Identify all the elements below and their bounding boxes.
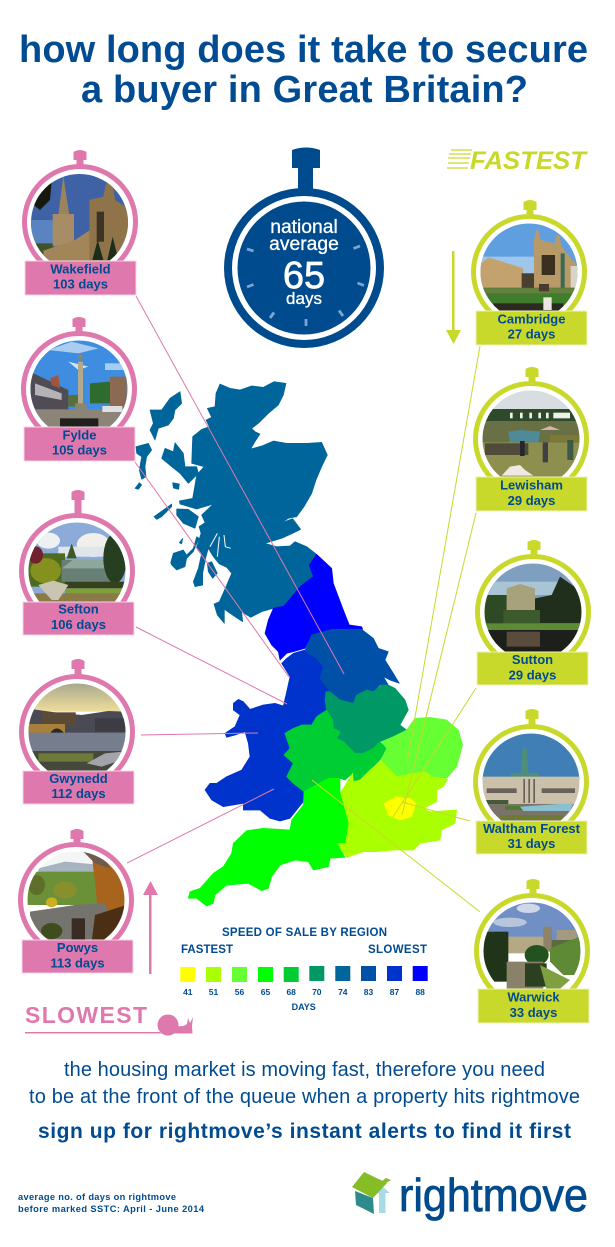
closing message: to be at the front of the queue when a property hits rightmove xyxy=(29,1086,580,1108)
closing message xyxy=(29,1059,580,1143)
region: East of England xyxy=(381,717,463,778)
photo: Powys autumn valley village xyxy=(27,852,128,942)
footnote xyxy=(18,1192,205,1214)
label: Sutton: 29 days xyxy=(509,668,556,682)
photo: Wakefield cathedral xyxy=(31,174,128,260)
legend: speed of sale by region: FASTEST xyxy=(181,944,233,956)
legend: speed of sale by region: 68 xyxy=(286,987,296,997)
arrow: fastest down xyxy=(446,251,461,344)
label: Sefton: Sefton xyxy=(58,602,99,616)
label: Warwick xyxy=(478,989,589,1023)
legend: speed of sale by region: 74 xyxy=(338,987,348,997)
label: Cambridge xyxy=(476,311,587,345)
stopwatch: Gwynedd xyxy=(22,659,134,804)
label: Gwynedd: 112 days xyxy=(51,786,106,801)
region: North West and Wales xyxy=(205,650,330,821)
icon: snail xyxy=(154,1014,193,1036)
region: West Midlands xyxy=(284,710,387,792)
slowest heading with snail xyxy=(25,1002,193,1036)
legend: speed of sale by region: 56 xyxy=(235,987,244,997)
icon: house with arrow xyxy=(352,1172,391,1214)
photo: Cambridge King's College xyxy=(478,222,580,312)
label: Sefton xyxy=(23,602,134,635)
legend: speed of sale by region xyxy=(180,927,428,1012)
label: Gwynedd xyxy=(23,771,134,804)
national average stopwatch: 65 xyxy=(283,255,325,297)
stopwatch: Waltham Forest xyxy=(476,709,587,854)
label: Cambridge: Cambridge xyxy=(498,312,565,326)
photo: Lewisham festival crowd xyxy=(482,390,580,476)
legend: speed of sale by region: 87 xyxy=(390,987,399,997)
label: Waltham Forest: 31 days xyxy=(508,836,555,851)
stopwatch: Powys xyxy=(20,829,133,973)
label: Wakefield xyxy=(25,261,136,295)
title xyxy=(19,29,588,111)
stopwatch: Sutton xyxy=(477,540,588,685)
connector lines from towns to map xyxy=(127,296,480,912)
photo: Waltham Forest town hall xyxy=(480,730,582,821)
legend: speed of sale by region: 41 xyxy=(183,987,193,997)
label: Waltham Forest xyxy=(476,821,587,854)
arrow: slowest up xyxy=(143,881,158,974)
label: Fylde xyxy=(24,427,135,461)
fastest heading: FASTEST xyxy=(470,147,589,175)
label: Warwick: 33 days xyxy=(510,1005,557,1020)
legend: speed of sale by region: DAYS xyxy=(292,1002,316,1012)
regions: England and Wales xyxy=(188,554,463,906)
photo: Warwick castle and river xyxy=(484,902,580,988)
stopwatch: Sefton xyxy=(22,490,134,635)
label: Fylde: Fylde xyxy=(63,428,96,442)
label: Powys: 113 days xyxy=(50,956,105,970)
legend: speed of sale by region: 65 xyxy=(261,987,270,997)
label: Waltham Forest: Waltham Forest xyxy=(483,821,581,836)
legend: speed of sale by region: 51 xyxy=(209,987,218,997)
region: Yorkshire xyxy=(305,629,399,703)
label: Sutton: Sutton xyxy=(512,652,553,667)
footnote: average no. of days on rightmove xyxy=(18,1192,176,1202)
label: Fylde: 105 days xyxy=(52,443,107,458)
legend: speed of sale by region: 83 xyxy=(364,987,373,997)
stopwatch: Cambridge xyxy=(474,200,587,345)
region: Scotland xyxy=(135,382,327,623)
stopwatch: Warwick xyxy=(476,879,589,1023)
label: Sutton xyxy=(477,652,588,685)
label: Powys xyxy=(22,940,133,973)
slowest heading with snail: SLOWEST xyxy=(25,1002,147,1028)
photo: Sefton park glasshouse xyxy=(28,522,126,602)
closing message: the housing market is moving fast, therefore you need xyxy=(64,1059,545,1081)
region: South East xyxy=(337,761,457,857)
label: Cambridge: 27 days xyxy=(508,326,555,342)
label: Gwynedd: Gwynedd xyxy=(49,771,108,786)
legend: speed of sale by region: SLOWEST xyxy=(368,944,427,956)
photo: Sutton country house and lake xyxy=(482,562,583,652)
national average stopwatch: national xyxy=(270,217,338,238)
title: how long does it take to secure xyxy=(19,29,588,71)
footnote: before marked SSTC: April - June 2014 xyxy=(18,1204,205,1214)
map of Great Britain by region xyxy=(135,382,463,906)
label: Wakefield: Wakefield xyxy=(50,262,111,276)
legend: speed of sale by region: SPEED OF SALE BY REGION xyxy=(222,927,387,939)
region: South West xyxy=(188,778,348,906)
national average stopwatch: average xyxy=(269,234,339,255)
label: Powys: Powys xyxy=(57,940,98,955)
label: Warwick: Warwick xyxy=(507,990,560,1004)
region: London xyxy=(384,797,416,820)
label: Lewisham: Lewisham xyxy=(500,478,563,492)
region: East Midlands xyxy=(325,685,408,753)
stopwatch: Fylde xyxy=(24,317,135,461)
region: North East and Cumbria xyxy=(265,554,363,660)
stopwatch: Wakefield xyxy=(24,150,136,295)
label: Lewisham: 29 days xyxy=(508,493,555,508)
title: a buyer in Great Britain? xyxy=(81,69,528,111)
closing message: sign up for rightmove’s instant alerts to find it first xyxy=(38,1120,571,1143)
stopwatch: Lewisham xyxy=(476,367,587,511)
national average stopwatch: days xyxy=(286,289,322,308)
label: Wakefield: 103 days xyxy=(53,277,108,292)
legend: speed of sale by region: 70 xyxy=(312,987,322,997)
label: Sefton: 106 days xyxy=(51,617,106,632)
national average stopwatch xyxy=(224,148,384,348)
rightmove logo: rightmove xyxy=(399,1169,588,1221)
photo: Fylde town monument xyxy=(28,338,128,429)
label: Lewisham xyxy=(476,477,587,511)
legend: speed of sale by region: 88 xyxy=(415,987,425,997)
photo: Gwynedd castle and estuary xyxy=(27,682,128,771)
